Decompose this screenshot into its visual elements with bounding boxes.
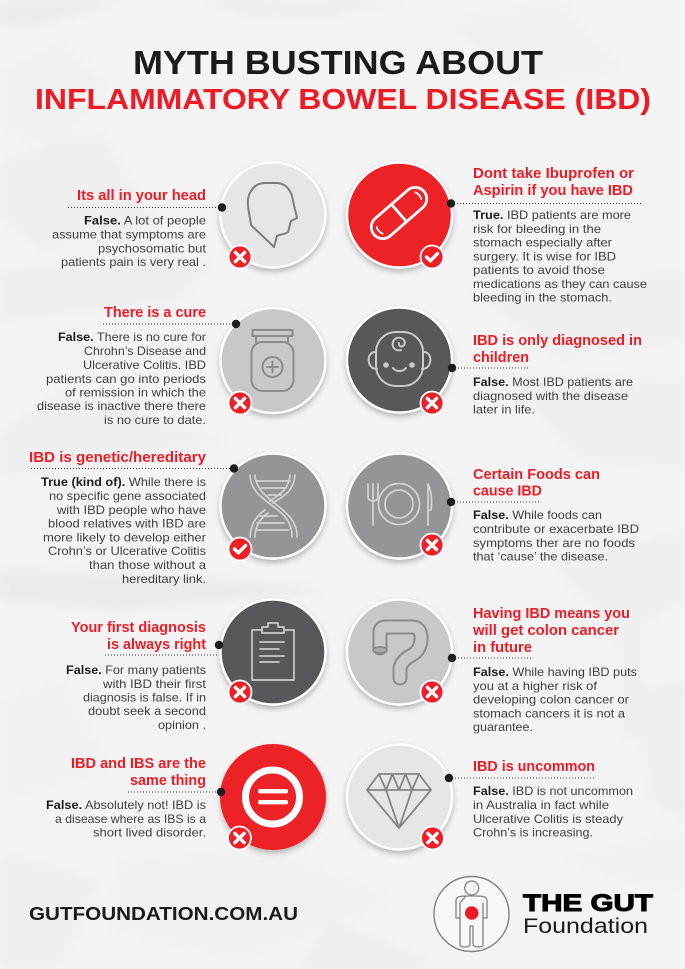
- text block: Crohn’s or Ulcerative Colitis: [48, 544, 206, 558]
- logo wordmark: Foundation: [523, 915, 648, 938]
- title: [35, 44, 651, 116]
- circle: [347, 600, 452, 704]
- badge: true: [228, 538, 252, 560]
- text block: with IBD people who have: [56, 503, 206, 517]
- heading: Your first diagnosis: [71, 620, 206, 636]
- panel: colon cancer: [347, 600, 637, 734]
- text block: [473, 375, 633, 416]
- heading: [472, 606, 630, 656]
- text block: in Australia in fact while: [473, 798, 609, 812]
- text block: guarantee.: [473, 720, 533, 734]
- circle: [220, 162, 326, 268]
- text block: assume that symptoms are: [52, 228, 206, 242]
- text block: False. While having IBD puts: [473, 665, 637, 679]
- panel: its all in your head: [52, 162, 326, 269]
- logo wordmark: THE GUT: [523, 890, 653, 917]
- text block: [52, 214, 207, 269]
- icon: medicine jar: [252, 330, 294, 391]
- icon: head: [248, 183, 297, 247]
- badge: false: [421, 826, 444, 850]
- logo wordmark: [523, 890, 653, 938]
- circle: [347, 308, 452, 412]
- heading: IBD is only diagnosed in: [473, 333, 642, 349]
- badge: false: [228, 826, 251, 850]
- text block: [41, 475, 206, 586]
- text block: [46, 798, 206, 840]
- panel: first diagnosis: [66, 600, 326, 732]
- panel: certain foods: [347, 454, 639, 564]
- heading: will get colon cancer: [472, 623, 619, 639]
- heading: [473, 333, 642, 366]
- logo mark: [434, 876, 509, 952]
- text block: is no cure to date.: [104, 413, 206, 427]
- text block: diagnosis is false. If in: [83, 690, 206, 704]
- text block: stomach especially after: [473, 236, 612, 250]
- icon: equals: [246, 770, 300, 824]
- text block: that ‘cause’ the disease.: [473, 550, 608, 564]
- panel: ibd is genetic: [29, 450, 326, 586]
- heading: children: [473, 350, 529, 366]
- text block: developing colon cancer or: [473, 692, 629, 706]
- panel: ibd is uncommon: [347, 744, 633, 850]
- heading: IBD is uncommon: [473, 759, 595, 775]
- text block: False. While foods can: [473, 508, 602, 522]
- title: INFLAMMATORY BOWEL DISEASE (IBD): [35, 84, 651, 116]
- heading: [473, 467, 600, 500]
- circle: [220, 454, 326, 558]
- text block: False. Most IBD patients are: [473, 375, 633, 389]
- text block: [37, 330, 206, 427]
- text block: diagnosed with the disease: [473, 389, 628, 403]
- heading: is always right: [107, 637, 206, 653]
- text block: of remission in which the: [65, 386, 206, 400]
- text block: contribute or exacerbate IBD: [473, 522, 639, 536]
- heading: Its all in your head: [77, 188, 206, 204]
- circle: [347, 454, 452, 558]
- title: MYTH BUSTING ABOUT: [133, 44, 543, 81]
- text block: you at a higher risk of: [473, 679, 598, 693]
- badge: false: [420, 534, 444, 556]
- text block: Crohn’s is increasing.: [473, 826, 593, 840]
- heading: in future: [473, 640, 532, 656]
- heading: [71, 620, 206, 653]
- text block: patients can go into periods: [46, 372, 206, 386]
- text block: Chrohn’s Disease and: [84, 344, 206, 358]
- badge: false: [228, 680, 252, 704]
- text block: True (kind of). While there is: [41, 475, 206, 489]
- text block: patients to avoid those: [473, 263, 605, 277]
- text block: False. For many patients: [66, 663, 206, 677]
- text block: bleeding in the stomach.: [473, 290, 612, 304]
- panel: ibd and ibs: [46, 744, 326, 850]
- text block: psychosomatic but: [98, 241, 207, 255]
- text block: patients pain is very real .: [61, 255, 206, 269]
- logo: the gut foundation: [434, 876, 653, 952]
- text block: short lived disorder.: [93, 826, 206, 840]
- text block: a disease where as IBS is a: [55, 812, 206, 826]
- heading: Certain Foods can: [473, 467, 600, 483]
- icon: dna: [250, 475, 297, 537]
- text block: surgery. It is wise for IBD: [473, 250, 616, 264]
- text block: risk for bleeding in the: [473, 222, 601, 236]
- text block: False. There is no cure for: [58, 330, 206, 344]
- text block: [473, 665, 637, 734]
- text block: than those without a: [89, 558, 206, 572]
- text block: Ulcerative Colitis. IBD: [83, 358, 206, 372]
- text block: more likely to develop either: [43, 530, 206, 544]
- text block: [66, 663, 207, 732]
- text block: opinion .: [158, 718, 206, 732]
- circle: [220, 308, 326, 413]
- heading: same thing: [130, 773, 206, 789]
- heading: Aspirin if you have IBD: [473, 183, 633, 199]
- icon: diamond: [367, 774, 431, 828]
- heading: [71, 756, 206, 789]
- heading: IBD is genetic/hereditary: [29, 450, 206, 466]
- text block: later in life.: [473, 402, 535, 416]
- icon: baby: [369, 332, 430, 386]
- text block: blood relatives with IBD are: [48, 516, 206, 530]
- panel: there is a cure: [37, 305, 326, 427]
- text block: symptoms ther are no foods: [473, 536, 635, 550]
- text block: False. IBD is not uncommon: [473, 784, 633, 798]
- icon: colon: [373, 627, 421, 678]
- text block: medications as they can cause: [473, 277, 647, 291]
- text block: no specific gene associated: [49, 489, 206, 503]
- text block: Ulcerative Colitis is steady: [473, 812, 623, 826]
- text block: [473, 508, 639, 564]
- text block: [473, 784, 633, 840]
- text block: stomach cancers it is not a: [473, 706, 625, 720]
- text block: with IBD their first: [102, 677, 207, 691]
- circle: [220, 600, 326, 704]
- text block: hereditary link.: [122, 572, 206, 586]
- heading: [473, 166, 634, 199]
- text block: True. IBD patients are more: [473, 208, 631, 222]
- heading: There is a cure: [104, 305, 206, 321]
- panel: ibuprofen: [347, 162, 647, 304]
- text block: False. Absolutely not! IBD is: [46, 798, 206, 812]
- circle: [347, 744, 452, 850]
- text block: False. A lot of people: [84, 214, 206, 228]
- badge: false: [420, 680, 444, 704]
- circle: [220, 744, 326, 850]
- heading: Having IBD means you: [473, 606, 630, 622]
- badge: false: [420, 392, 444, 414]
- icon: plate and cutlery: [368, 484, 432, 525]
- text block: disease is inactive there there: [37, 399, 206, 413]
- heading: Dont take Ibuprofen or: [473, 166, 634, 182]
- text block: doubt seek a second: [88, 704, 206, 718]
- circle: [347, 162, 452, 268]
- website url: GUTFOUNDATION.COM.AU: [29, 904, 298, 924]
- badge: false: [228, 246, 252, 268]
- badge: false: [228, 392, 252, 414]
- text block: [473, 208, 647, 304]
- icon: pill: [367, 183, 431, 243]
- heading: IBD and IBS are the: [71, 756, 206, 772]
- icon: clipboard: [252, 623, 294, 680]
- badge: true: [420, 246, 444, 268]
- panel: only in children: [347, 308, 642, 416]
- heading: cause IBD: [473, 484, 542, 500]
